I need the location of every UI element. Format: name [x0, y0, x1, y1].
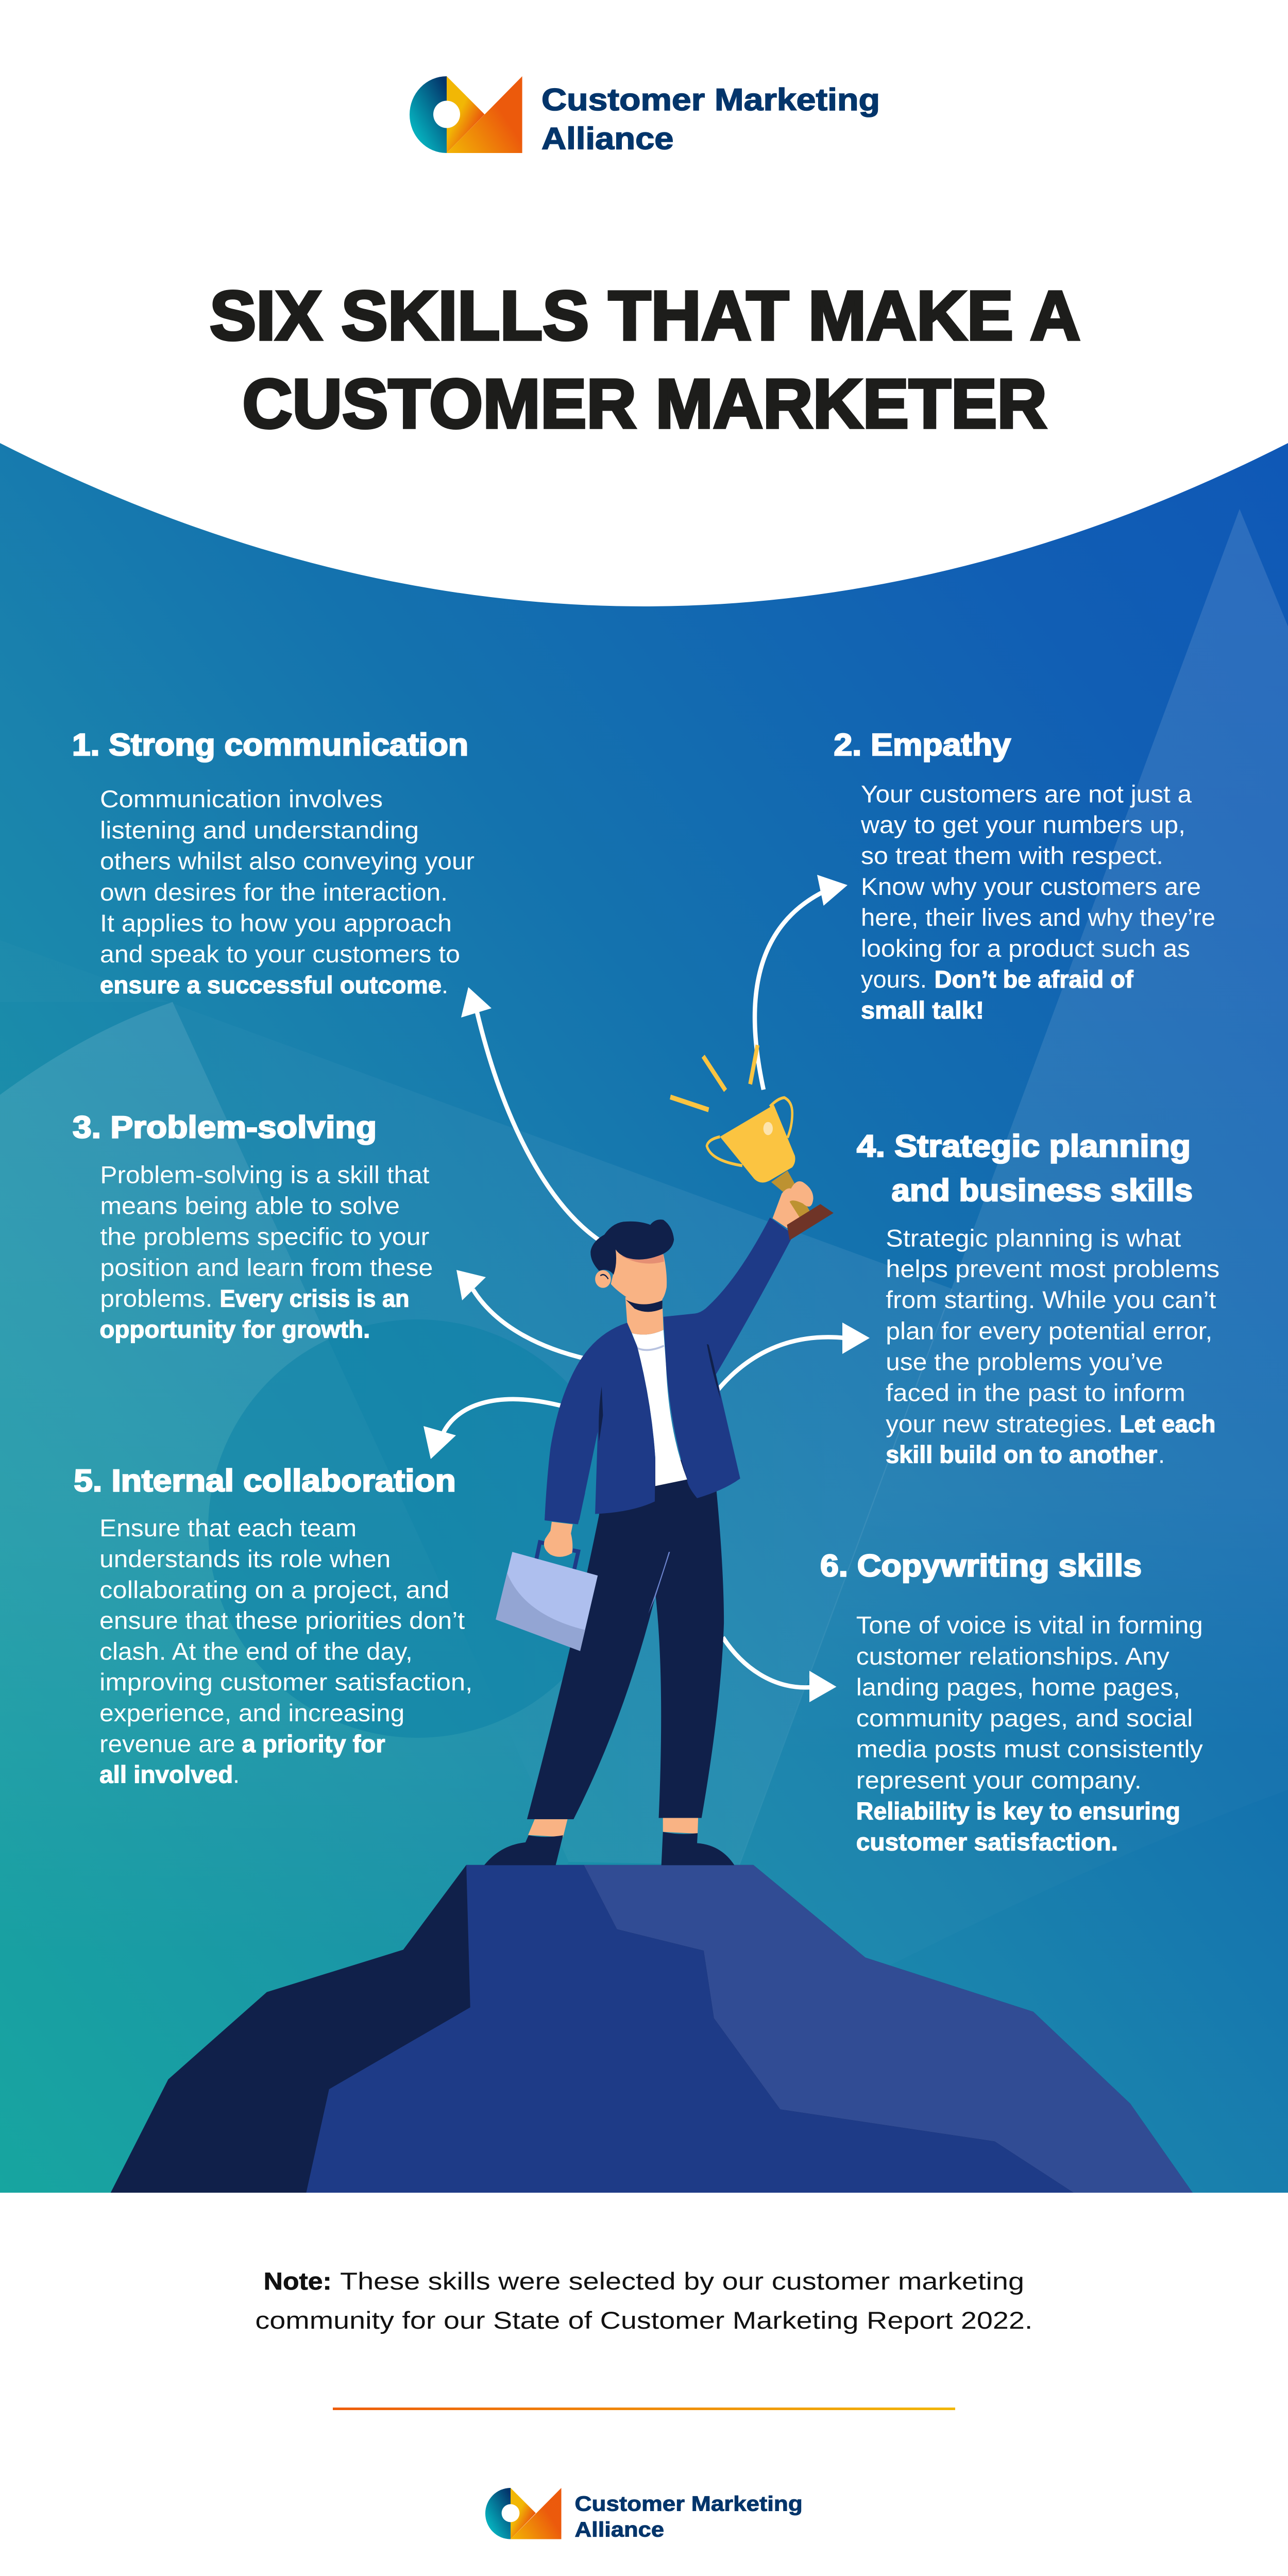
- heading 4: [857, 1129, 1193, 1208]
- body text 3: [99, 1161, 433, 1343]
- body text 4: [886, 1224, 1219, 1468]
- body text 2: looking for a product such as: [861, 935, 1190, 962]
- arrow to empathy: [755, 875, 848, 1090]
- heading 6: 6. Copywriting skills: [820, 1549, 1142, 1583]
- mountain: [111, 1865, 1193, 2193]
- body text 5: a priority for: [242, 1730, 385, 1757]
- panel: 6 copywriting skills: [820, 1549, 1203, 1856]
- top logo: Customer Marketing: [541, 82, 880, 117]
- body text 2: here, their lives and why they’re: [861, 904, 1215, 931]
- body text 4: your new strategies.: [886, 1410, 1113, 1437]
- body text 2: Your customers are not just a: [861, 780, 1192, 807]
- heading 3: 3. Problem-solving: [73, 1110, 377, 1145]
- bottom logo: Customer Marketing: [575, 2492, 803, 2516]
- body text 5: all involved: [99, 1761, 233, 1788]
- note text: These skills were selected by our customer marketing: [340, 2267, 1024, 2295]
- trophy, head and torso: [545, 1045, 834, 1520]
- title: SIX SKILLS THAT MAKE A: [210, 277, 1080, 354]
- bottom logo: Alliance: [575, 2518, 664, 2541]
- body text 6: Reliability is key to ensuring: [856, 1797, 1180, 1824]
- panel: 4 strategic planning: [857, 1129, 1219, 1468]
- body text 6: represent your company.: [856, 1766, 1142, 1793]
- body text 5: collaborating on a project, and: [99, 1576, 449, 1603]
- arrow to internal collaboration: [423, 1399, 564, 1459]
- title: [210, 277, 1080, 443]
- heading 4: 4. Strategic planning: [857, 1129, 1191, 1163]
- bottom logo: [485, 2488, 803, 2541]
- note text: Note:: [264, 2267, 332, 2295]
- body text 4: skill build on to another: [886, 1440, 1157, 1468]
- legs and briefcase: [484, 1460, 735, 1865]
- body text 5: experience, and increasing: [99, 1699, 404, 1726]
- body text 6: community pages, and social: [856, 1704, 1193, 1732]
- panel: 2 empathy: [834, 727, 1215, 1024]
- body text 3: Every crisis is an: [219, 1285, 409, 1312]
- arrow to copywriting skills: [723, 1637, 837, 1702]
- body text 5: clash. At the end of the day,: [99, 1637, 413, 1665]
- body text 6: customer satisfaction.: [856, 1828, 1118, 1856]
- body text 2: so treat them with respect.: [861, 842, 1163, 869]
- heading 4: and business skills: [891, 1173, 1193, 1208]
- body text 4: .: [1158, 1440, 1165, 1468]
- body text 5: understands its role when: [99, 1545, 391, 1572]
- body text 5: improving customer satisfaction,: [99, 1668, 472, 1696]
- top logo: Alliance: [541, 122, 674, 156]
- body text 6: media posts must consistently: [856, 1735, 1203, 1762]
- panel: 1 strong communication: [72, 727, 474, 998]
- body text 6: [856, 1612, 1203, 1856]
- body text 1: Communication involves: [100, 785, 383, 812]
- body text 5: .: [233, 1761, 240, 1788]
- body text 4: use the problems you’ve: [886, 1348, 1163, 1376]
- body text 4: plan for every potential error,: [886, 1317, 1212, 1344]
- body text 3: opportunity for growth.: [99, 1316, 370, 1343]
- note text: community for our State of Customer Marketing Report 2022.: [255, 2307, 1032, 2334]
- body text 6: customer relationships. Any: [856, 1642, 1170, 1670]
- body text 5: Ensure that each team: [99, 1514, 357, 1541]
- illustration: person holding trophy: [484, 1045, 834, 1865]
- body text 1: others whilst also conveying your: [100, 848, 474, 875]
- title: CUSTOMER MARKETER: [242, 365, 1047, 443]
- body text 5: ensure that these priorities don’t: [99, 1607, 465, 1634]
- arrow to problem-solving: [456, 1270, 587, 1359]
- body text 4: from starting. While you can’t: [886, 1286, 1216, 1313]
- body text 4: helps prevent most problems: [886, 1255, 1219, 1282]
- body text 4: Strategic planning is what: [886, 1224, 1181, 1251]
- body text 2: small talk!: [861, 996, 984, 1024]
- heading 5: 5. Internal collaboration: [74, 1464, 456, 1498]
- body text 4: faced in the past to inform: [886, 1379, 1185, 1406]
- body text 1: listening and understanding: [100, 816, 419, 843]
- body text 1: .: [442, 971, 448, 998]
- body text 1: It applies to how you approach: [100, 909, 452, 937]
- body text 3: position and learn from these: [100, 1254, 433, 1281]
- body text 2: yours.: [861, 965, 927, 993]
- arrow to strong communication: [461, 987, 603, 1243]
- panel: 3 problem-solving: [73, 1110, 433, 1343]
- body text 1: ensure a successful outcome: [100, 971, 442, 998]
- body text 2: way to get your numbers up,: [860, 811, 1185, 838]
- heading 2: 2. Empathy: [834, 727, 1011, 762]
- body text 5: [99, 1514, 472, 1788]
- panel: 5 internal collaboration: [74, 1464, 472, 1788]
- body text 3: Problem-solving is a skill that: [100, 1161, 429, 1189]
- note text: [255, 2267, 1032, 2334]
- body text 1: own desires for the interaction.: [100, 878, 448, 906]
- body text 5: revenue are: [99, 1730, 235, 1757]
- gradient background panel with curved top: [0, 443, 1288, 2193]
- body text 2: Don’t be afraid of: [935, 965, 1133, 993]
- body text 2: Know why your customers are: [861, 873, 1201, 900]
- heading 1: 1. Strong communication: [72, 727, 468, 762]
- top logo: [410, 76, 880, 156]
- arrow to strategic planning: [716, 1323, 870, 1392]
- body text 6: Tone of voice is vital in forming: [856, 1612, 1203, 1639]
- body text 3: problems.: [100, 1285, 212, 1312]
- body text 2: [860, 780, 1215, 1024]
- body text 3: means being able to solve: [100, 1192, 400, 1219]
- body text 1: [100, 785, 474, 998]
- body text 4: Let each: [1120, 1410, 1215, 1437]
- body text 3: the problems specific to your: [100, 1223, 429, 1250]
- body text 1: and speak to your customers to: [100, 940, 460, 968]
- body text 6: landing pages, home pages,: [856, 1673, 1180, 1701]
